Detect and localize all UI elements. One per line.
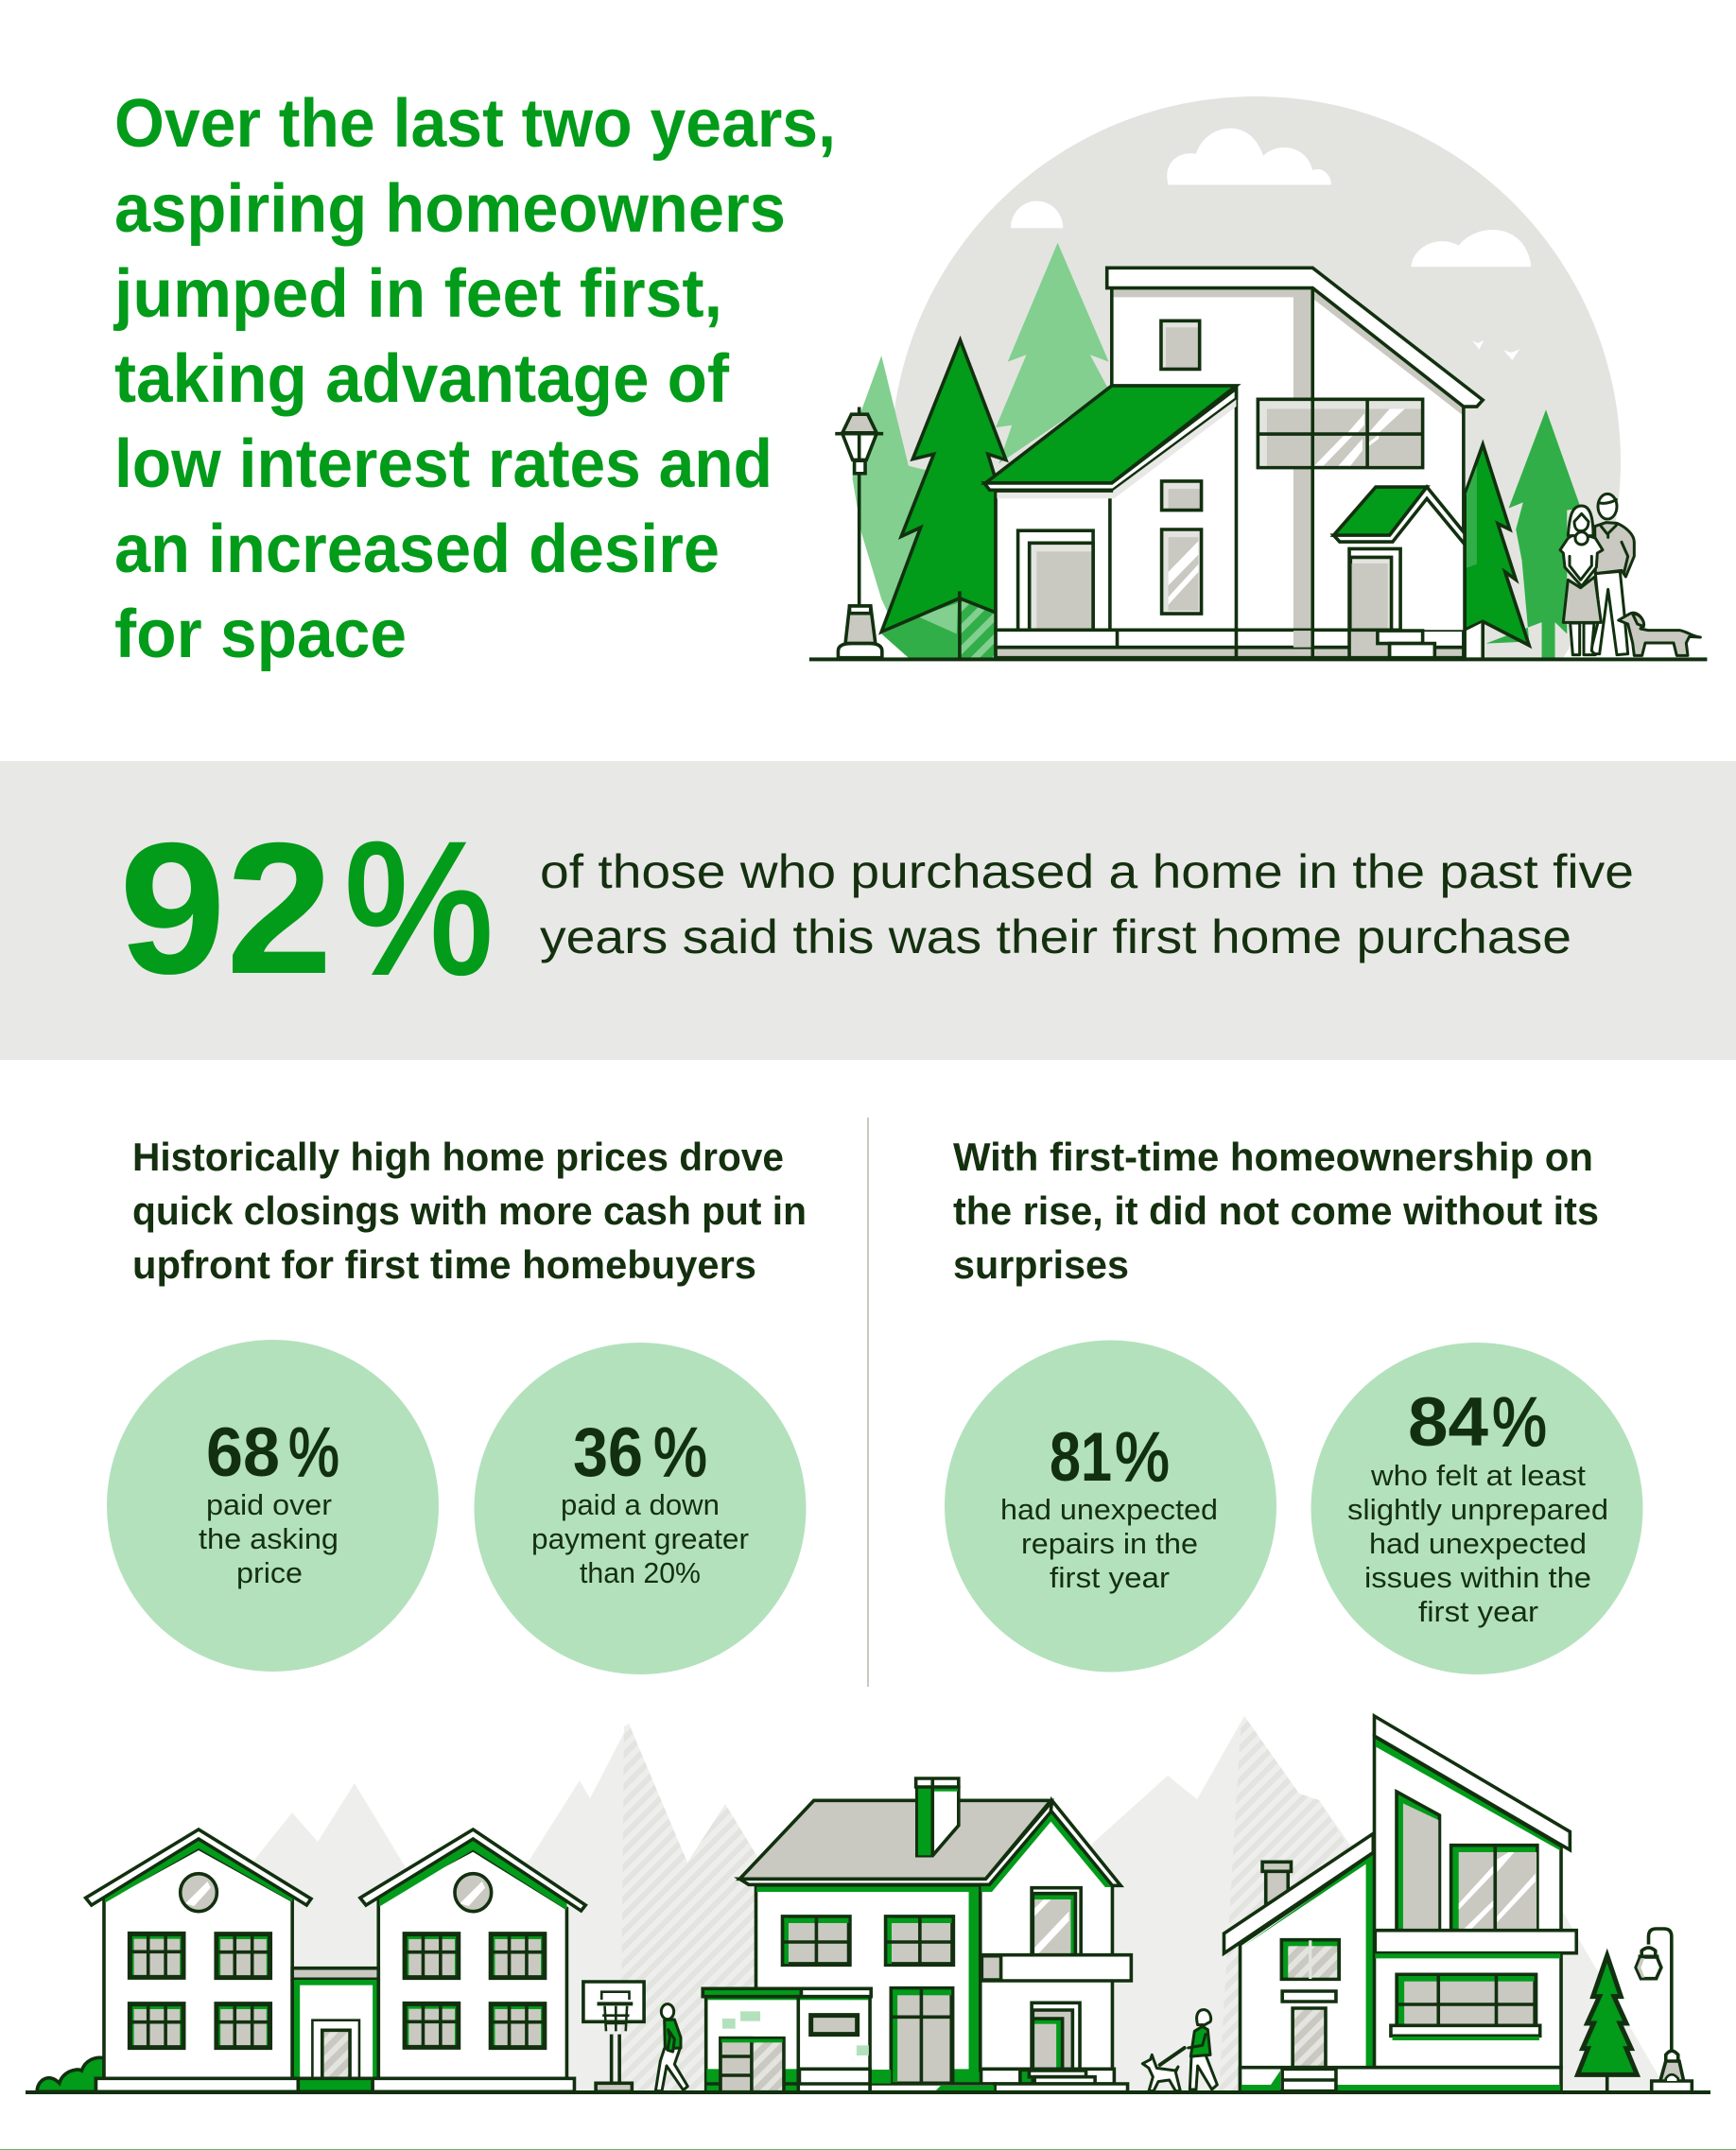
garage annex (703, 1988, 871, 2092)
stat circle: 68%: paid over (206, 1488, 332, 1521)
basketball hoop (583, 1982, 644, 2091)
big number: % (344, 804, 494, 1013)
stat circle: 84%: slightly unprepared (1347, 1493, 1608, 1526)
front-left pine (881, 340, 1006, 632)
stat circle: 84%: first year (1418, 1595, 1538, 1628)
stat circle: 68%: price (236, 1556, 303, 1589)
stat circle: 68%: the asking (199, 1522, 339, 1555)
heading: prices: Historically high home prices drove (132, 1135, 784, 1179)
balcony (981, 1955, 1131, 1981)
big window (1451, 1846, 1537, 1931)
stat circle: 84%: had unexpected (1369, 1527, 1587, 1560)
heading: prices (132, 1135, 807, 1287)
stat circle: 81% (945, 1341, 1276, 1672)
mountains (208, 1716, 1659, 2092)
banner background (0, 761, 1736, 1060)
clouds and birds (1011, 129, 1531, 360)
modern house (1224, 1716, 1692, 2092)
hatched mountain left (620, 1724, 759, 2092)
banner text: years said this was their first home purchase (540, 910, 1571, 963)
foundation (870, 2069, 1128, 2092)
couple and dog (1560, 494, 1700, 655)
twin houses (37, 1829, 644, 2091)
middle windows (1162, 481, 1202, 614)
dog walker (1142, 2010, 1217, 2091)
stat circle: 84%: % (1492, 1384, 1547, 1461)
stat circle: 36%: paid a down (561, 1488, 720, 1521)
front-right pine (1465, 444, 1529, 646)
heading: prices: upfront for first time homebuyers (132, 1242, 756, 1287)
banner text: of those who purchased a home in the past five (540, 845, 1634, 898)
stat circle: 84%: who felt at least (1370, 1459, 1586, 1492)
balcony (1375, 1931, 1576, 1953)
title: low interest rates and (114, 426, 773, 502)
stat circle: 36%: than 20% (580, 1556, 701, 1589)
title: Over the last two years, (114, 86, 836, 162)
small pine (1577, 1955, 1637, 2092)
upper roof slab (1107, 268, 1483, 407)
family house (703, 1778, 1131, 2092)
street lamp (835, 407, 883, 658)
upper windows (783, 1917, 953, 1965)
stat circle: 84%: issues within the (1364, 1561, 1591, 1594)
chimney (1266, 1870, 1288, 1903)
bottom edge line (0, 2149, 1736, 2150)
right twin house (360, 1829, 585, 2078)
title: for space (114, 597, 407, 672)
illustration: neighbourhood street (26, 1716, 1710, 2094)
main roof (739, 1800, 1050, 1879)
grey sky circle (894, 96, 1621, 658)
scene artwork (809, 129, 1707, 659)
gable window (1032, 1888, 1081, 1955)
green lower roof (985, 386, 1236, 483)
porch door (1032, 2003, 1080, 2069)
title (113, 86, 836, 672)
stat circle: 84%: 84 (1408, 1384, 1488, 1461)
tall window (1397, 1792, 1439, 1931)
heading: surprises: surprises (953, 1242, 1129, 1287)
house outlines (996, 288, 1464, 658)
street line (26, 2090, 1710, 2094)
house shadows (1112, 288, 1464, 658)
title: jumped in feet first, (113, 256, 722, 332)
woman (1560, 506, 1603, 655)
stat circle: 68%: 68 (206, 1414, 280, 1491)
tall wing (1375, 1737, 1561, 2068)
main walls (756, 1886, 981, 2085)
foundation (996, 630, 1464, 658)
background trees (853, 243, 1581, 658)
front door (1018, 530, 1093, 630)
foundations (95, 2078, 574, 2091)
stat circle: 36%: % (653, 1414, 707, 1491)
left twin house (86, 1829, 311, 2078)
stat circle: 81%: had unexpected (1000, 1493, 1218, 1526)
lower window (1391, 1975, 1540, 2040)
stat circle: 81%: 81 (1050, 1419, 1112, 1496)
stat circle: 81%: % (1115, 1419, 1170, 1496)
double door (892, 1988, 952, 2084)
banner text (540, 845, 1634, 963)
title: aspiring homeowners (114, 171, 786, 247)
foundation (1241, 2068, 1561, 2091)
dachshund (1619, 613, 1700, 655)
stat circle: 36% (475, 1343, 806, 1674)
lower left wing (1241, 1853, 1375, 2091)
stat circle: 68% (107, 1340, 439, 1672)
title: an increased desire (114, 511, 720, 587)
walking man (655, 2004, 687, 2091)
ground line (809, 657, 1707, 661)
column divider (867, 1118, 869, 1687)
slanted roof (1375, 1716, 1570, 1850)
stat circle: 36%: payment greater (531, 1522, 749, 1555)
left window (1281, 1940, 1339, 2068)
man (1590, 494, 1634, 655)
heading: surprises: the rise, it did not come without its (953, 1188, 1599, 1233)
large grid window (1258, 399, 1423, 468)
gable section (981, 1811, 1112, 2071)
centre entrance (292, 1968, 378, 2078)
chimney (916, 1778, 959, 1856)
upper small window (1161, 321, 1200, 369)
house body (996, 288, 1464, 630)
hatched mountain right (1219, 1716, 1352, 2092)
heading: surprises (953, 1135, 1599, 1287)
big number: 92 (119, 804, 333, 1013)
stat circle: 81%: first year (1050, 1561, 1170, 1594)
stat circle: 81%: repairs in the (1021, 1527, 1198, 1560)
stat circle: 84% (1311, 1343, 1643, 1674)
big number (119, 804, 494, 1013)
heading: prices: quick closings with more cash put in (132, 1188, 807, 1233)
left roof (1224, 1833, 1373, 1953)
stat circle: 36%: 36 (573, 1414, 643, 1491)
stat banner (0, 761, 1736, 1060)
stat circle: 68%: % (288, 1414, 339, 1491)
bush (37, 2057, 104, 2091)
illustration: house with family (809, 96, 1708, 662)
heading: surprises: With first-time homeownership on (953, 1135, 1593, 1179)
porch (1333, 487, 1467, 658)
roof trim (984, 389, 1236, 490)
lamp post (1636, 1929, 1692, 2092)
title: taking advantage of (114, 341, 730, 417)
